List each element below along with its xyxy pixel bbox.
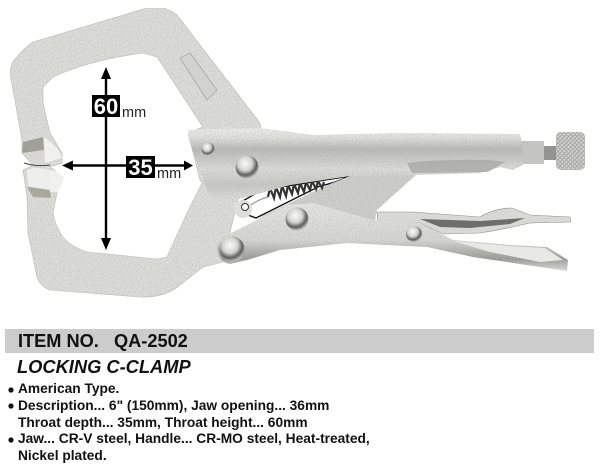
horizontal arrow — [62, 160, 193, 170]
knurled adjusting knob — [556, 132, 585, 170]
product photo: locking C-clamp — [10, 8, 585, 297]
rivet: upper small — [202, 142, 214, 156]
item number bar — [5, 329, 594, 353]
bullet: description: Description... 6" (150mm), Jaw opening... 36mm — [18, 398, 329, 413]
rivet: lower large — [220, 236, 244, 262]
60 label box — [92, 95, 120, 117]
specification list — [8, 381, 370, 463]
rivet: lower right — [406, 226, 422, 242]
upper handle — [188, 128, 523, 203]
dimension: throat depth 35mm: 35 — [128, 155, 153, 180]
lower release lever — [377, 208, 571, 234]
dimension: throat height 60mm — [92, 67, 146, 250]
threaded bolt — [520, 141, 544, 164]
spring pivot — [234, 200, 252, 218]
bullet: description: Throat depth... 35mm, Throat height... 60mm — [18, 415, 308, 430]
bullet: type: American Type. — [18, 381, 119, 396]
link plate — [258, 174, 417, 221]
upper jaw tip — [22, 137, 44, 153]
spring cavity — [240, 176, 350, 218]
jaw gap — [24, 163, 50, 166]
bullet: description — [8, 398, 329, 430]
lower jaw tip — [27, 187, 51, 198]
upper handle shaded band — [407, 160, 505, 173]
bullet: materials: Jaw... CR-V steel, Handle... CR-MO steel, Heat-treated, — [18, 431, 370, 446]
stamped logo recess — [180, 53, 217, 100]
35 label box — [126, 156, 155, 178]
lower handle — [217, 203, 568, 271]
bullet: materials — [8, 431, 370, 463]
bullet: materials: Nickel plated. — [18, 448, 107, 463]
item label: ITEM NO. — [18, 331, 99, 351]
C-shaped jaw frame — [10, 8, 262, 297]
vertical arrow — [101, 67, 111, 250]
lower handle tip highlight — [453, 241, 563, 262]
mm unit: mm — [122, 105, 146, 121]
rivet: upper large — [236, 156, 258, 178]
spring — [268, 181, 324, 198]
item code: QA-2502 — [114, 331, 188, 351]
mm unit: mm — [157, 166, 181, 182]
dimension: throat depth 35mm — [62, 155, 193, 182]
dimension: throat height 60mm: 60 — [94, 94, 118, 119]
product title: LOCKING C-CLAMP — [17, 356, 191, 377]
rivet: lower middle — [286, 208, 308, 230]
